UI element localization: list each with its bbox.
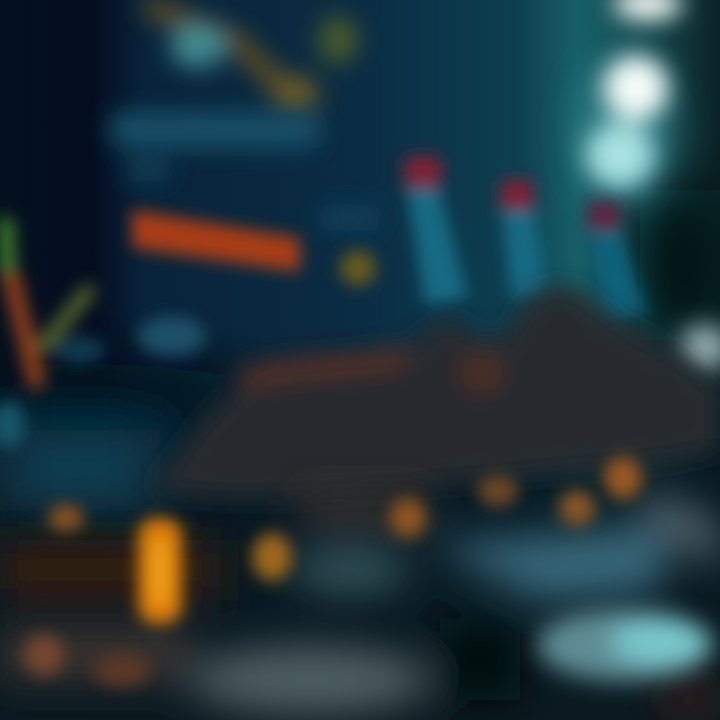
glowing orange candle [138,518,182,624]
text band: blurred orange label [132,210,376,356]
chart: upper teal and orange trend streaks [145,5,358,115]
chart: left green and orange line [0,225,106,449]
text band: blurred teal heading [110,112,380,231]
bar 1 [404,156,468,305]
bar 3 [588,202,646,320]
bar 2 [500,180,548,300]
orange bokeh lights [24,457,642,686]
bar chart: three teal columns with red caps [404,156,646,320]
bottom panel: glassy foreground surfaces [0,490,720,718]
glowing lights: top right [581,0,720,372]
area chart: dark brown mountain [150,286,720,499]
